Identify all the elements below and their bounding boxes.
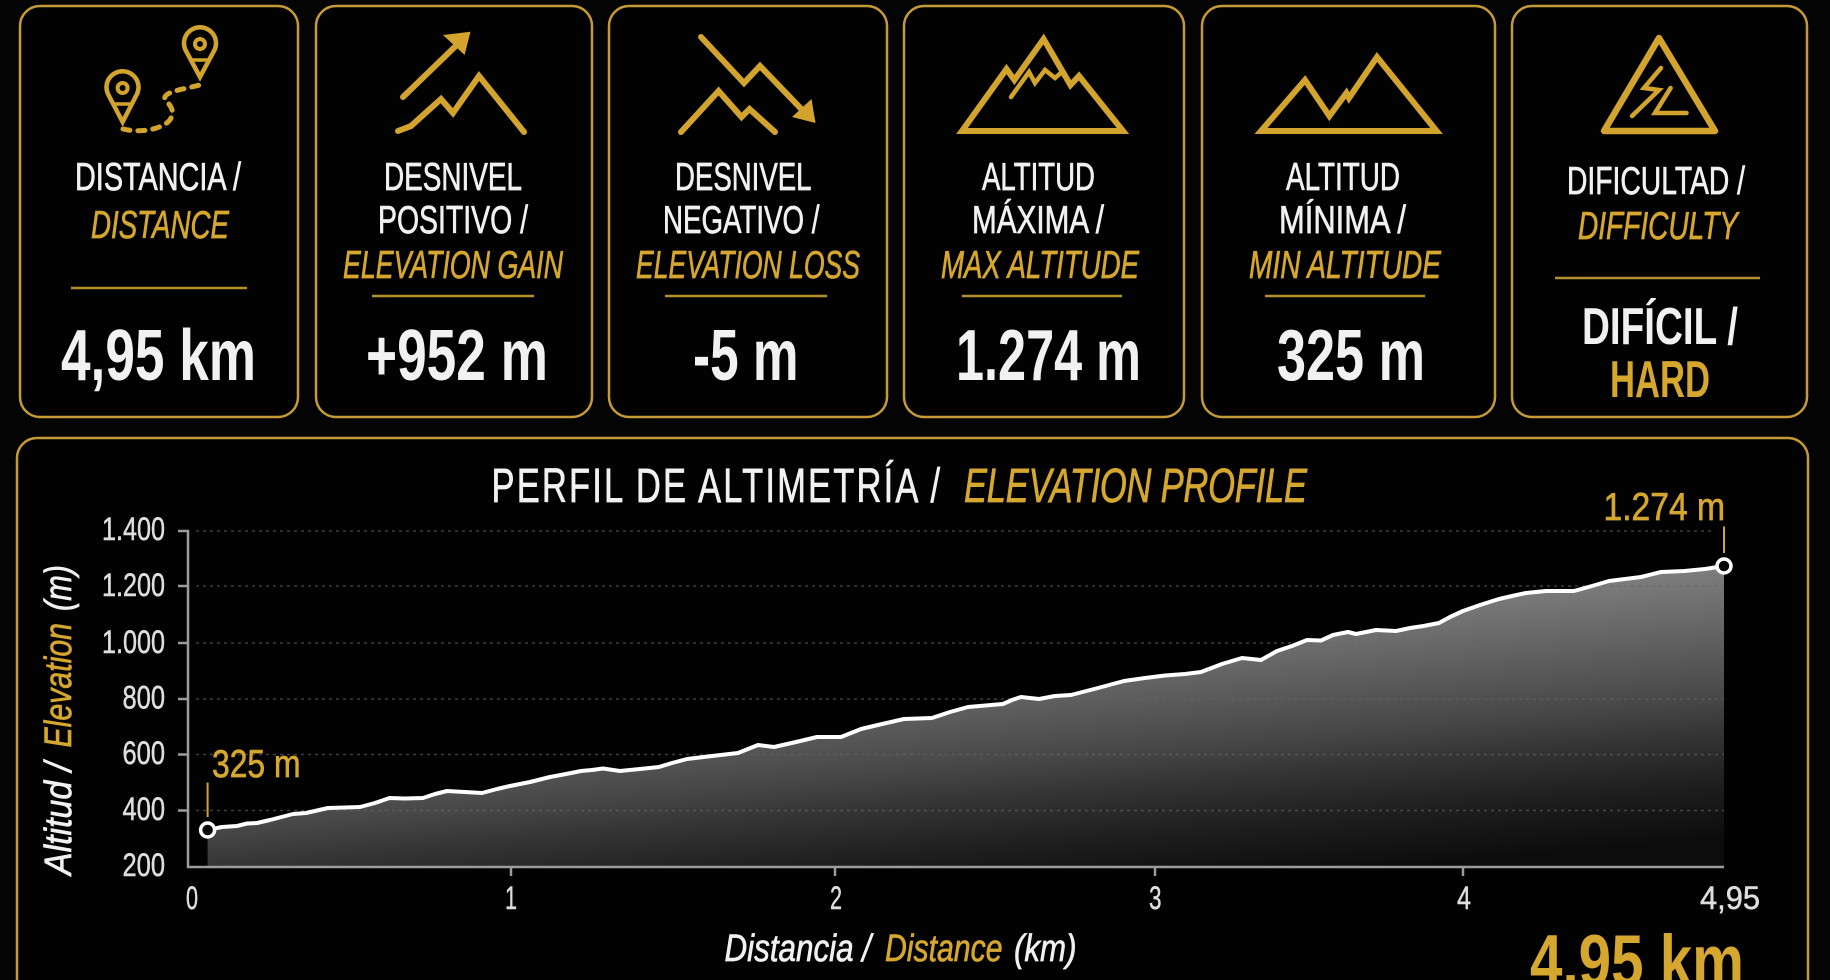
label: elevation loss: ELEVATION LOSS <box>636 244 860 287</box>
value: hard: HARD <box>1610 351 1710 409</box>
x axis tick labels: 3 <box>1149 880 1162 916</box>
value: 1.274 m: 1.274 m <box>956 316 1141 396</box>
icon: rockfall warning triangle <box>1604 38 1715 131</box>
icon: snow-capped mountain <box>962 39 1123 131</box>
y axis tick labels: 400 <box>122 791 165 827</box>
x axis tick labels: 1 <box>505 880 517 916</box>
callout: end altitude: 1.274 m <box>1604 486 1725 529</box>
label: desnivel negativo <box>663 156 820 242</box>
value: 325 m: 325 m <box>1277 316 1425 396</box>
value: 4,95 km: 4,95 km <box>61 316 256 396</box>
callout: end altitude <box>1604 486 1731 573</box>
y axis tick labels: 1.000 <box>102 624 165 660</box>
icon: low mountain <box>1261 57 1437 131</box>
x axis title: Distancia / <box>724 928 874 970</box>
icon: arrow up over mountain <box>398 32 524 132</box>
label: desnivel negativo: NEGATIVO / <box>663 199 820 242</box>
label: min altitude: MIN ALTITUDE <box>1249 244 1442 287</box>
label: altitud minima: MÍNIMA / <box>1279 199 1406 242</box>
y axis tick labels: 1.400 <box>102 511 165 547</box>
y axis tick labels <box>102 511 165 883</box>
elevation line <box>208 566 1724 830</box>
x axis tick labels: 4,95 <box>1700 880 1760 916</box>
x axis title <box>724 928 1076 970</box>
label: altitud minima: ALTITUD <box>1286 156 1400 199</box>
y axis tick labels: 200 <box>122 847 165 883</box>
panel: elevation profile <box>17 438 1808 980</box>
heading: perfil de altimetria: PERFIL DE ALTIMETRÍA / <box>492 458 940 512</box>
label: desnivel positivo: POSITIVO / <box>378 199 528 242</box>
card: elevation loss <box>609 6 887 417</box>
icon: arrow down over mountain <box>681 37 816 132</box>
heading: elevation profile: ELEVATION PROFILE <box>964 458 1308 512</box>
card: min altitude <box>1202 6 1495 417</box>
label: difficulty: DIFFICULTY <box>1578 205 1740 248</box>
label: distance: DISTANCE <box>91 204 230 247</box>
y axis tick labels: 600 <box>122 735 165 771</box>
axes and tick marks <box>178 531 1724 876</box>
label: max altitude: MAX ALTITUDE <box>941 244 1140 287</box>
callout: start altitude <box>201 743 300 837</box>
x axis tick labels: 2 <box>830 880 842 916</box>
grid lines <box>196 531 1724 810</box>
card: difficulty <box>1512 6 1807 417</box>
label: altitud maxima: ALTITUD <box>982 156 1095 199</box>
label: dificultad: DIFICULTAD / <box>1567 160 1745 203</box>
value: dificil: DIFÍCIL / <box>1582 298 1738 356</box>
label: desnivel negativo: DESNIVEL <box>675 156 812 199</box>
value: +952 m: +952 m <box>366 316 548 396</box>
value: -5 m: -5 m <box>693 316 798 396</box>
label: altitud maxima: MÁXIMA / <box>972 199 1104 242</box>
card: elevation gain <box>316 6 592 417</box>
y axis title: elevation: Elevation <box>38 623 80 748</box>
card: distance <box>20 6 298 417</box>
x axis title: Distance <box>885 928 1002 970</box>
y axis title: altitud: Altitud / <box>38 759 80 877</box>
label: altitud maxima <box>972 156 1104 242</box>
label: altitud minima <box>1279 156 1406 242</box>
label: elevation gain: ELEVATION GAIN <box>343 244 564 287</box>
callout: start altitude: 325 m <box>212 743 300 786</box>
label: distancia: DISTANCIA / <box>75 156 241 199</box>
x axis tick labels: 0 <box>186 880 198 916</box>
y axis tick labels: 1.200 <box>102 567 165 603</box>
y axis tick labels: 800 <box>122 680 165 716</box>
x axis tick labels: 4 <box>1457 880 1471 916</box>
x axis tick labels <box>186 880 1760 916</box>
area under elevation curve <box>208 566 1724 867</box>
label: desnivel positivo: DESNIVEL <box>384 156 522 199</box>
card: max altitude <box>904 6 1184 417</box>
x axis title: (km) <box>1014 928 1076 970</box>
y axis title: unit: (m) <box>38 565 80 611</box>
icon: route between two pins <box>106 27 216 131</box>
label: desnivel positivo <box>378 156 528 242</box>
